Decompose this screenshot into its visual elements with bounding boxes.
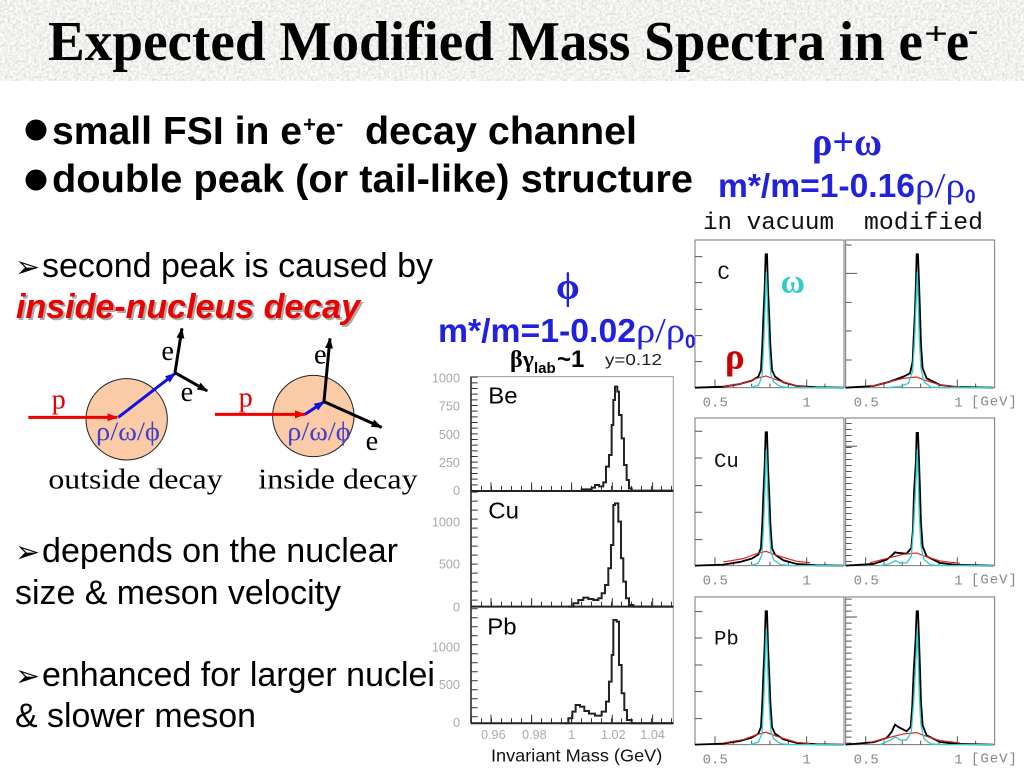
x axis labels: 1 (568, 728, 575, 742)
second peak text: ➢ (15, 250, 40, 285)
y axis labels: 750 (439, 400, 460, 414)
rho+omega mass formula: 0 (965, 187, 976, 208)
column headings: in vacuum (703, 210, 834, 237)
paper texture background (0, 0, 1024, 81)
y axis labels: 1000 (432, 516, 460, 530)
outside decay diagram: outside decay (48, 464, 223, 495)
beta gamma label (510, 346, 662, 377)
beta gamma label: lab (534, 360, 556, 377)
y axis labels: 250 (439, 456, 460, 470)
bullet 1: e (315, 110, 336, 153)
phi mass formula: m*/m=1-0.02 (438, 312, 636, 349)
x axis title: Invariant Mass (GeV) (491, 746, 662, 766)
C x axis labels: 0.5 (703, 395, 728, 411)
Cu modified panel (846, 418, 995, 566)
rho omega spectra grid (695, 240, 1018, 768)
C modified panel (846, 240, 995, 388)
y axis labels (432, 372, 460, 730)
phi invariant mass chart (432, 372, 673, 766)
rho+omega mass formula (718, 166, 976, 208)
title: - (968, 11, 978, 47)
x axis labels: 1.04 (640, 728, 665, 742)
inside-nucleus decay highlight: inside-nucleus decay (18, 290, 364, 328)
rho+omega label (718, 119, 976, 208)
Cu in vacuum panel (695, 418, 844, 566)
element labels: Cu (488, 497, 519, 523)
Pb in vacuum panel: Pb (714, 629, 739, 652)
rho+omega mass formula: m*/m=1-0.16 (718, 167, 915, 204)
title: e (946, 11, 969, 73)
title: Expected Modified Mass Spectra in e (48, 11, 923, 73)
y axis labels: 0 (453, 601, 460, 615)
x axis labels (481, 728, 665, 742)
C x axis labels (703, 395, 1018, 411)
enhanced text (15, 656, 435, 735)
Pb x axis labels: 0.5 (854, 752, 879, 768)
y axis labels: 500 (439, 678, 460, 692)
Cu x axis labels: 0.5 (854, 573, 879, 589)
phi mass formula: ρ/ρ (636, 311, 685, 350)
Pb x axis labels: [GeV] (971, 752, 1018, 768)
element labels: Be (488, 382, 518, 408)
Be histogram (572, 387, 673, 491)
rho+omega symbols: ρ+ω (812, 119, 882, 164)
phi label (438, 266, 696, 353)
inside decay diagram: e (314, 339, 327, 370)
phi mass formula: 0 (685, 332, 696, 353)
Cu in vacuum panel: Cu (714, 451, 739, 474)
inside decay diagram: p (239, 383, 253, 414)
chart frame and axes (471, 377, 673, 723)
column headings (703, 210, 983, 237)
x axis labels: 0.98 (522, 728, 547, 742)
C x axis labels: 1 (954, 395, 963, 411)
decay diagrams (28, 328, 418, 495)
inside decay diagram: ρ/ω/ϕ (287, 417, 351, 446)
Cu histogram (568, 503, 673, 607)
column headings: modified (864, 210, 983, 237)
y axis labels: 0 (453, 484, 460, 498)
Pb x axis labels: 1 (954, 752, 963, 768)
second peak text: second peak is caused by (42, 247, 433, 285)
bullet 1: - (336, 111, 343, 136)
beta gamma label: ~1 (557, 346, 584, 373)
left explanation: dependence (15, 532, 435, 735)
outside decay diagram: e (181, 377, 193, 408)
Pb modified panel (846, 597, 995, 745)
x axis labels: 1.02 (601, 728, 626, 742)
depends text: size & meson velocity (15, 574, 341, 612)
Cu x axis labels: 0.5 (703, 573, 728, 589)
row: Cu (695, 418, 1018, 589)
inside decay diagram: e (366, 426, 378, 457)
enhanced text: enhanced for larger nuclei (42, 656, 435, 694)
Cu x axis labels: 1 (954, 573, 963, 589)
left explanation: second peak (15, 247, 433, 328)
inside-nucleus decay highlight: inside-nucleus decay (16, 288, 362, 326)
inside decay diagram (215, 338, 418, 495)
bullet 1: decay channel (365, 110, 637, 153)
y axis labels: 1000 (432, 641, 460, 655)
y axis labels: 0 (453, 716, 460, 730)
C in vacuum panel: ω (781, 263, 805, 300)
element labels (487, 382, 519, 639)
inside decay diagram: inside decay (258, 464, 418, 495)
depends text (15, 532, 398, 612)
rho+omega mass formula: ρ/ρ (915, 166, 965, 205)
depends text: depends on the nuclear (42, 532, 398, 570)
row: Pb (695, 597, 1018, 768)
element labels: Pb (487, 613, 517, 639)
beta gamma label: y=0.12 (605, 352, 662, 369)
Cu x axis labels: [GeV] (971, 573, 1018, 589)
row: C (695, 240, 1018, 411)
Pb x axis labels: 1 (802, 752, 811, 768)
y axis labels: 500 (439, 428, 460, 442)
Cu x axis labels: 1 (802, 573, 811, 589)
bullet 1: + (303, 112, 316, 137)
outside decay diagram: p (52, 384, 66, 415)
C x axis labels: [GeV] (971, 395, 1018, 411)
enhanced text: ➢ (15, 659, 40, 694)
outside decay diagram (28, 328, 223, 495)
C in vacuum panel (695, 240, 844, 388)
Cu x axis labels (703, 573, 1018, 589)
x axis labels: 0.96 (481, 728, 506, 742)
outside decay diagram: e (161, 336, 174, 367)
Pb in vacuum panel (695, 597, 844, 745)
bullet 1: small FSI in e (52, 110, 302, 153)
C in vacuum panel: ρ (725, 335, 745, 376)
bullet 2: double peak (or tail-like) structure (52, 158, 693, 201)
C in vacuum panel: C (717, 263, 730, 286)
title: + (924, 15, 948, 51)
y axis labels: 1000 (432, 372, 460, 386)
beta gamma label: βγ (510, 347, 534, 373)
title band (0, 0, 1024, 81)
depends text: ➢ (15, 535, 40, 570)
enhanced text: & slower meson (15, 697, 256, 735)
C x axis labels: 1 (802, 395, 811, 411)
y axis labels: 500 (439, 557, 460, 571)
top bullet list (26, 110, 693, 201)
phi mass formula (438, 311, 696, 353)
C x axis labels: 0.5 (854, 395, 879, 411)
Pb x axis labels (703, 752, 1018, 768)
Pb histogram (565, 620, 673, 723)
Pb x axis labels: 0.5 (703, 752, 728, 768)
outside decay diagram: ρ/ω/ϕ (96, 417, 160, 446)
phi symbol: ϕ (556, 266, 580, 308)
bullet 1 (26, 110, 637, 153)
